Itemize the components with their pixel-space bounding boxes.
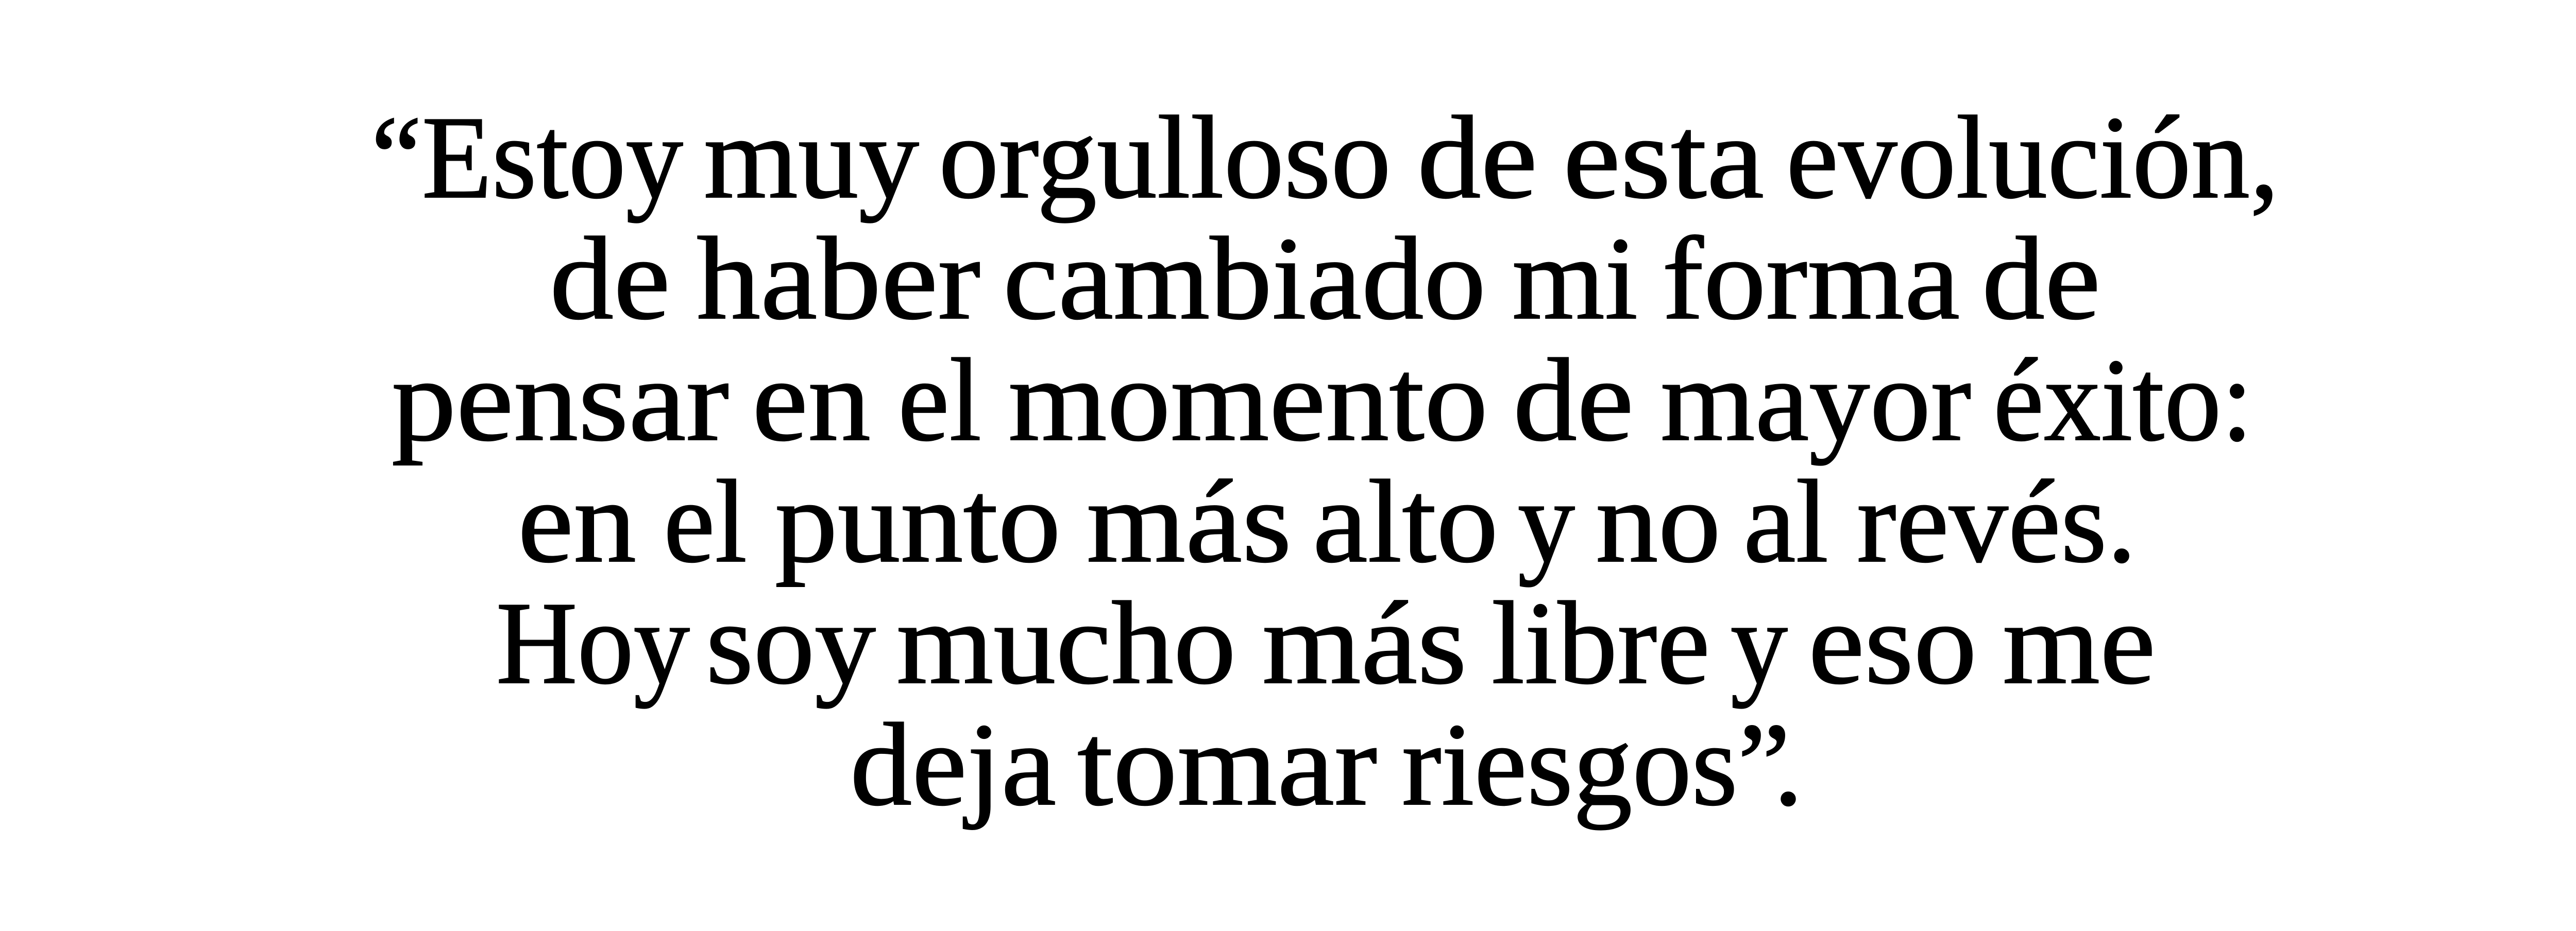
quote line 6: riesgos” <box>1402 699 1790 830</box>
quote line 4: al <box>1743 456 1828 587</box>
quote line 1: “Estoy <box>371 92 683 223</box>
quote line 4: y <box>1518 456 1575 587</box>
quote line 6: deja <box>850 699 1056 830</box>
quote line 4: más <box>1087 456 1292 587</box>
quote line 1: muy <box>704 92 919 223</box>
quote line 5: eso <box>1808 577 1977 709</box>
quote line 5: más <box>1262 577 1467 709</box>
quote line 3: el <box>898 334 981 465</box>
quote line 2: forma <box>1662 213 1960 344</box>
quote text block <box>371 92 2279 830</box>
quote line 4: no <box>1596 456 1721 587</box>
quote line 5: Hoy <box>496 577 690 709</box>
quote line 2: de <box>1982 213 2100 344</box>
quote line 4: revés. <box>1857 456 2137 587</box>
quote line 6: . <box>1773 699 1803 830</box>
quote line 4: el <box>664 456 747 587</box>
quote line 1: esta <box>1563 92 1764 223</box>
quote line 5: mucho <box>896 577 1236 709</box>
quote line 2: cambiado <box>1003 213 1486 344</box>
quote line 3: mayor <box>1660 334 1971 465</box>
quote line 4: en <box>518 456 636 587</box>
quote line 4: punto <box>775 456 1061 587</box>
quote line 3: momento <box>1008 334 1488 465</box>
quote line 1: evolución, <box>1786 92 2279 223</box>
quote line 2: de <box>550 213 670 344</box>
quote line 1: de <box>1417 92 1537 223</box>
quote line 2: mi <box>1512 213 1638 344</box>
quote line 2: haber <box>697 213 980 344</box>
quote line 6: tomar <box>1077 699 1377 830</box>
quote line 5: me <box>2003 577 2156 709</box>
quote line 5: soy <box>706 577 876 709</box>
quote line 5: y <box>1731 577 1788 709</box>
quote line 1: orgulloso <box>939 92 1391 223</box>
quote line 3: en <box>752 334 871 465</box>
quote line 3: de <box>1513 334 1634 465</box>
quote line 4: alto <box>1313 456 1498 587</box>
quote line 5: libre <box>1492 577 1710 709</box>
quote line 3: pensar <box>392 334 729 465</box>
quote line 3: éxito: <box>1993 334 2253 465</box>
